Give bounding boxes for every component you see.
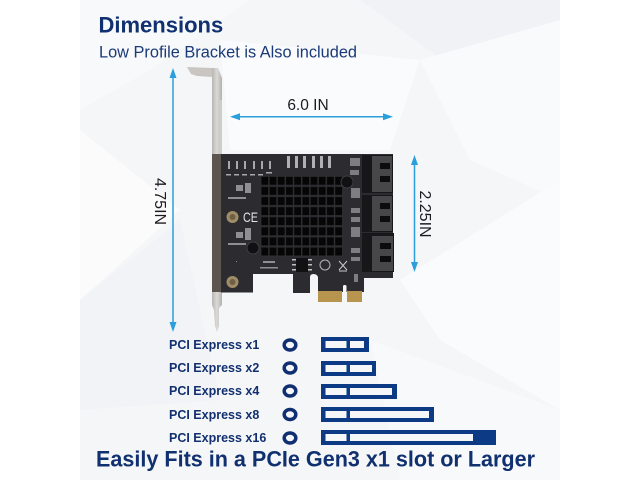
gold edge connectors [318,291,362,302]
row: PCI Express x2 [169,361,376,376]
label: 2.25IN: 2.25IN [416,190,433,238]
controller chip [292,258,312,272]
circuit board [221,154,393,293]
PCIe expansion card [221,154,394,302]
footer headline: Easily Fits in a PCIe Gen3 x1 slot or Larger [96,446,535,472]
mounting screw top [226,211,238,223]
subheading: low profile bracket note: Low Profile Bracket is Also included [99,42,357,61]
top component row [287,156,331,168]
heatsink [260,176,342,257]
row: PCI Express x16: PCI Express x16 [169,431,266,445]
SATA connector 3 [362,233,394,272]
row: PCI Express x8: PCI Express x8 [169,408,259,422]
SATA connector 1 [362,155,393,193]
right component column [350,158,360,282]
arrow: height 4.75 IN [170,68,176,332]
row: PCI Express x4: PCI Express x4 [169,384,259,398]
mounting screw bottom [226,276,238,288]
background panel [80,0,560,480]
arrow: height 2.25 IN [411,155,418,272]
row: PCI Express x8 [169,407,434,422]
row: PCI Express x2: PCI Express x2 [169,361,259,375]
CE mark: CE [243,209,258,225]
row: PCI Express x1 [169,337,369,352]
row: PCI Express x1: PCI Express x1 [169,338,259,352]
recycling bin mark [339,261,347,271]
label: 6.0 IN: 6.0 IN [287,97,329,114]
RoHS mark [320,260,330,270]
label: 4.75IN: 4.75IN [151,178,168,225]
left-side chip markings [228,183,278,268]
capacitor bottom [247,242,259,254]
slot between edge connectors [343,285,346,302]
metal bracket [187,67,222,332]
capacitor top [341,176,353,188]
row: PCI Express x4 [169,384,397,399]
left component row [226,161,272,176]
arrow: width 6.0 IN [230,113,393,120]
row: PCI Express x16 [169,430,496,445]
SATA connector 2 [362,195,393,232]
heading: Dimensions: Dimensions [98,13,223,38]
